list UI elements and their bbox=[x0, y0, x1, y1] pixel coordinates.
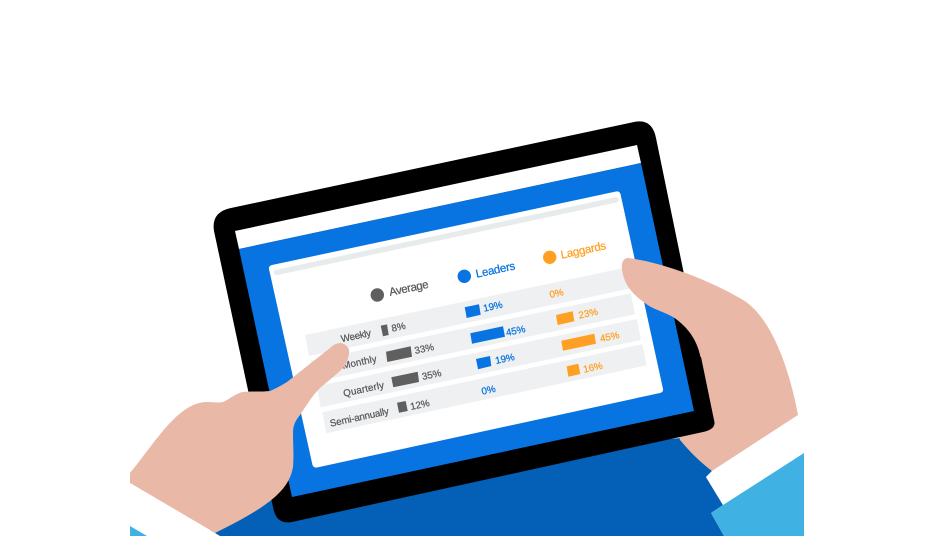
laggards values bbox=[549, 287, 621, 376]
laggards values: 16% bbox=[582, 361, 604, 376]
leaders values: 19% bbox=[482, 300, 504, 315]
shirt cuff bbox=[706, 412, 804, 505]
leaders values: 0% bbox=[481, 384, 497, 398]
tablet screen bbox=[235, 145, 694, 497]
card panel bbox=[269, 191, 663, 468]
data card bbox=[269, 191, 663, 468]
left shirt cuff bbox=[130, 483, 220, 536]
legend: average: Average bbox=[388, 279, 430, 299]
leaders bars bbox=[465, 304, 505, 369]
screen background bbox=[239, 163, 694, 497]
card title bar bbox=[276, 200, 616, 272]
laggards values: 23% bbox=[578, 307, 599, 322]
row labels: Quarterly bbox=[342, 380, 385, 400]
leaders values: 19% bbox=[494, 352, 516, 367]
legend: laggards bbox=[543, 240, 608, 264]
average values: 35% bbox=[421, 368, 443, 383]
average values: 8% bbox=[391, 321, 407, 335]
laggards values: 45% bbox=[599, 330, 621, 345]
leaders values: 45% bbox=[505, 324, 527, 339]
jacket sleeve bbox=[711, 453, 804, 536]
average bars bbox=[381, 324, 419, 413]
left sleeve bbox=[130, 483, 220, 536]
laggards values: 0% bbox=[549, 287, 565, 301]
right sleeve bbox=[706, 412, 804, 536]
row labels bbox=[329, 328, 390, 430]
leaders values bbox=[481, 300, 527, 398]
table rows bbox=[305, 268, 647, 433]
row labels: Semi-annually bbox=[329, 406, 390, 430]
legend: average bbox=[371, 279, 430, 302]
legend: leaders bbox=[458, 260, 517, 283]
left jacket sleeve bbox=[130, 526, 147, 536]
right thumb bbox=[622, 258, 745, 360]
legend: laggards: Laggards bbox=[560, 240, 608, 262]
row labels: Monthly bbox=[341, 354, 378, 372]
average values bbox=[391, 321, 443, 413]
jacket body bbox=[205, 438, 724, 536]
row labels: Weekly bbox=[340, 328, 372, 345]
legend: leaders: Leaders bbox=[475, 260, 517, 281]
average values: 12% bbox=[409, 398, 431, 413]
average values: 33% bbox=[414, 342, 435, 357]
laggards bars bbox=[556, 311, 596, 377]
browser bar bbox=[235, 145, 641, 249]
tablet frame bbox=[214, 121, 715, 522]
right hand bbox=[628, 258, 798, 471]
left hand bbox=[130, 343, 349, 533]
